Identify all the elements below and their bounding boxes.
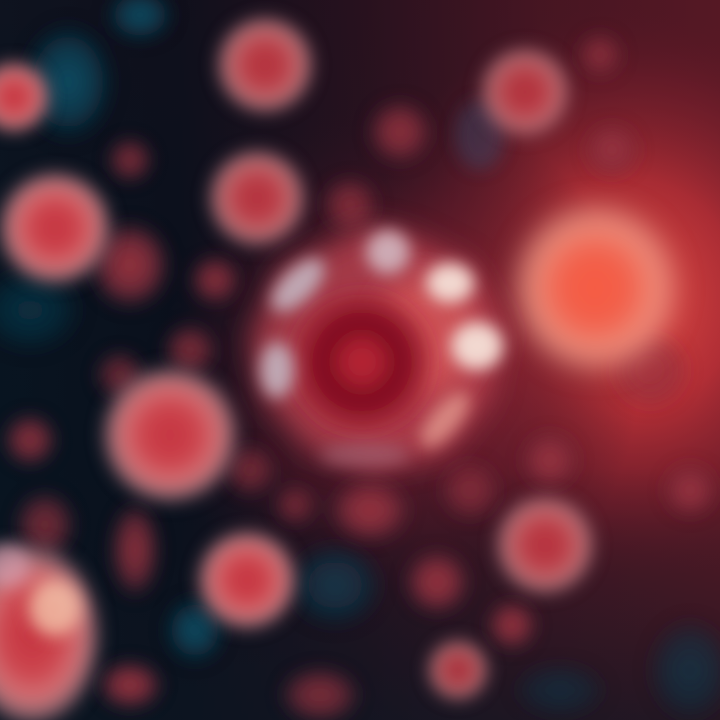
virus core [286,286,438,438]
virus body [250,225,505,470]
cell: upper center [205,146,309,250]
bottom-left cell highlight [0,543,81,636]
cell: lower right [492,492,598,598]
virus inner warmth [375,275,475,395]
cell: lower left large [98,363,242,507]
cell: bottom left corner [0,540,104,720]
virus spikes highlights: warm [412,263,503,455]
cell: bottom [425,637,491,703]
central virus [250,225,505,470]
cell: top right [477,44,573,140]
cell: left [0,168,115,288]
cell: top center [213,13,317,117]
virus spikes highlights: grey [260,230,410,467]
bright cell [513,204,677,372]
background glow: right side [160,5,720,640]
cell: upper left edge [0,59,52,135]
cell: lower center [194,527,300,633]
